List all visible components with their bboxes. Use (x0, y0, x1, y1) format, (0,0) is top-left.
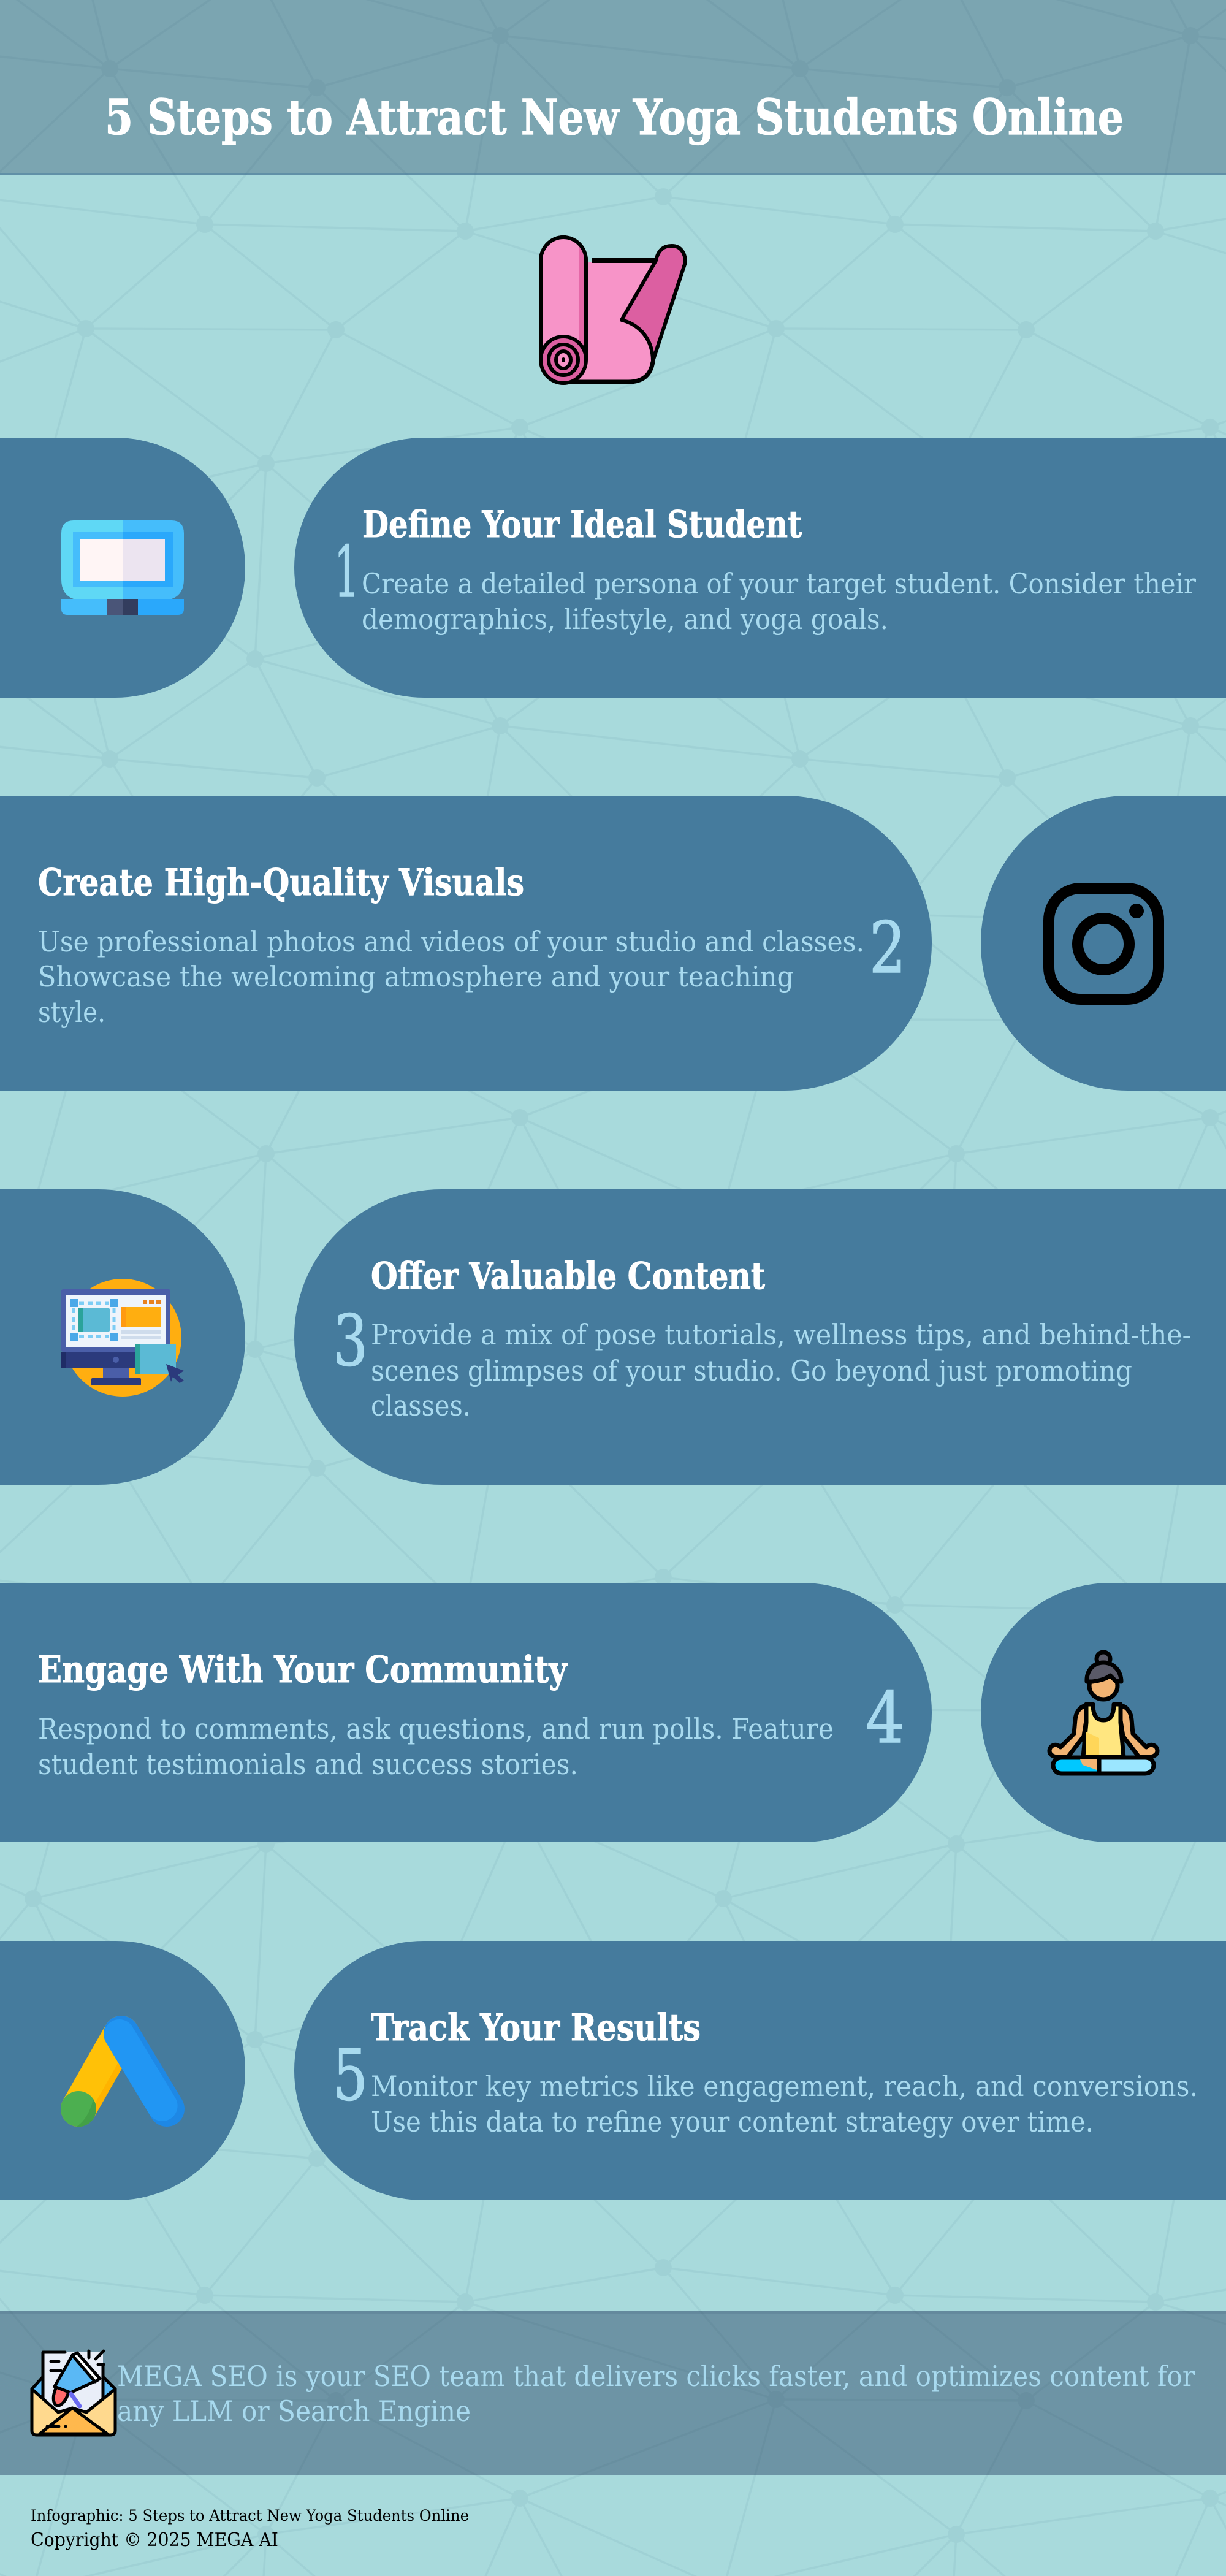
step 3 number: 3 (333, 1300, 368, 1382)
step 3 body: classes. (371, 1389, 471, 1422)
step 1 body (362, 567, 1196, 636)
step 1 number: 1 (334, 532, 359, 614)
footer credits: Copyright © 2025 MEGA AI (31, 2529, 278, 2551)
step 3 body (371, 1318, 1191, 1422)
promo text: any LLM or Search Engine (117, 2395, 471, 2428)
step 3 heading: Offer Valuable Content (371, 1255, 765, 1298)
step 2 body (38, 925, 864, 1029)
icon: google ads logo (61, 2032, 167, 2127)
step 4 text pill (0, 1583, 932, 1842)
promo text (117, 2360, 1195, 2428)
step 3 icon pill (0, 1189, 245, 1485)
step 5 heading: Track Your Results (371, 2006, 701, 2049)
step 3 row (0, 1189, 1226, 1485)
step 1 row (0, 438, 1226, 698)
step 5 body: Use this data to refine your content strategy over time. (371, 2105, 1094, 2138)
step 2 number: 2 (869, 907, 906, 989)
step 5 icon pill (0, 1941, 245, 2200)
step 4 number: 4 (866, 1677, 905, 1759)
step 4 icon pill (981, 1583, 1226, 1842)
icon: web design monitor (61, 1279, 184, 1397)
step 5 row (0, 1941, 1226, 2200)
step 2 body: Use professional photos and videos of your studio and classes. (38, 925, 864, 958)
promo band (0, 2311, 1226, 2475)
step 1 heading: Define Your Ideal Student (362, 503, 802, 546)
step 3 body: scenes glimpses of your studio. Go beyond just promoting (371, 1354, 1132, 1387)
step 2 heading: Create High-Quality Visuals (38, 861, 524, 904)
icon: instagram (1049, 888, 1159, 999)
icon: meditating woman (1049, 1652, 1157, 1774)
step 2 icon pill (981, 796, 1226, 1091)
step 2 text pill (0, 796, 932, 1091)
step 1 body: demographics, lifestyle, and yoga goals. (362, 603, 888, 636)
step 2 body: Showcase the welcoming atmosphere and your teaching (38, 960, 794, 993)
step 1 icon pill (0, 438, 245, 698)
footer credits: Infographic: 5 Steps to Attract New Yoga Students Online (31, 2507, 469, 2525)
step 2 body: style. (38, 996, 105, 1029)
step 2 row (0, 796, 1226, 1091)
step 4 body: student testimonials and success stories. (38, 1748, 578, 1781)
footer credits (31, 2507, 469, 2551)
step 4 row (0, 1583, 1226, 1842)
step 1 text pill (294, 438, 1226, 698)
step 5 body (371, 2070, 1198, 2138)
step 4 heading: Engage With Your Community (38, 1648, 568, 1691)
header band (0, 0, 1226, 175)
step 5 number: 5 (333, 2035, 368, 2117)
icon: laptop (61, 520, 184, 615)
icon: yoga mat (541, 237, 685, 383)
step 4 body (38, 1712, 834, 1781)
step 5 text pill (294, 1941, 1226, 2200)
step 4 body: Respond to comments, ask questions, and run polls. Feature (38, 1712, 834, 1745)
step 3 text pill (294, 1189, 1226, 1485)
icon: mail with megaphone (32, 2351, 115, 2435)
